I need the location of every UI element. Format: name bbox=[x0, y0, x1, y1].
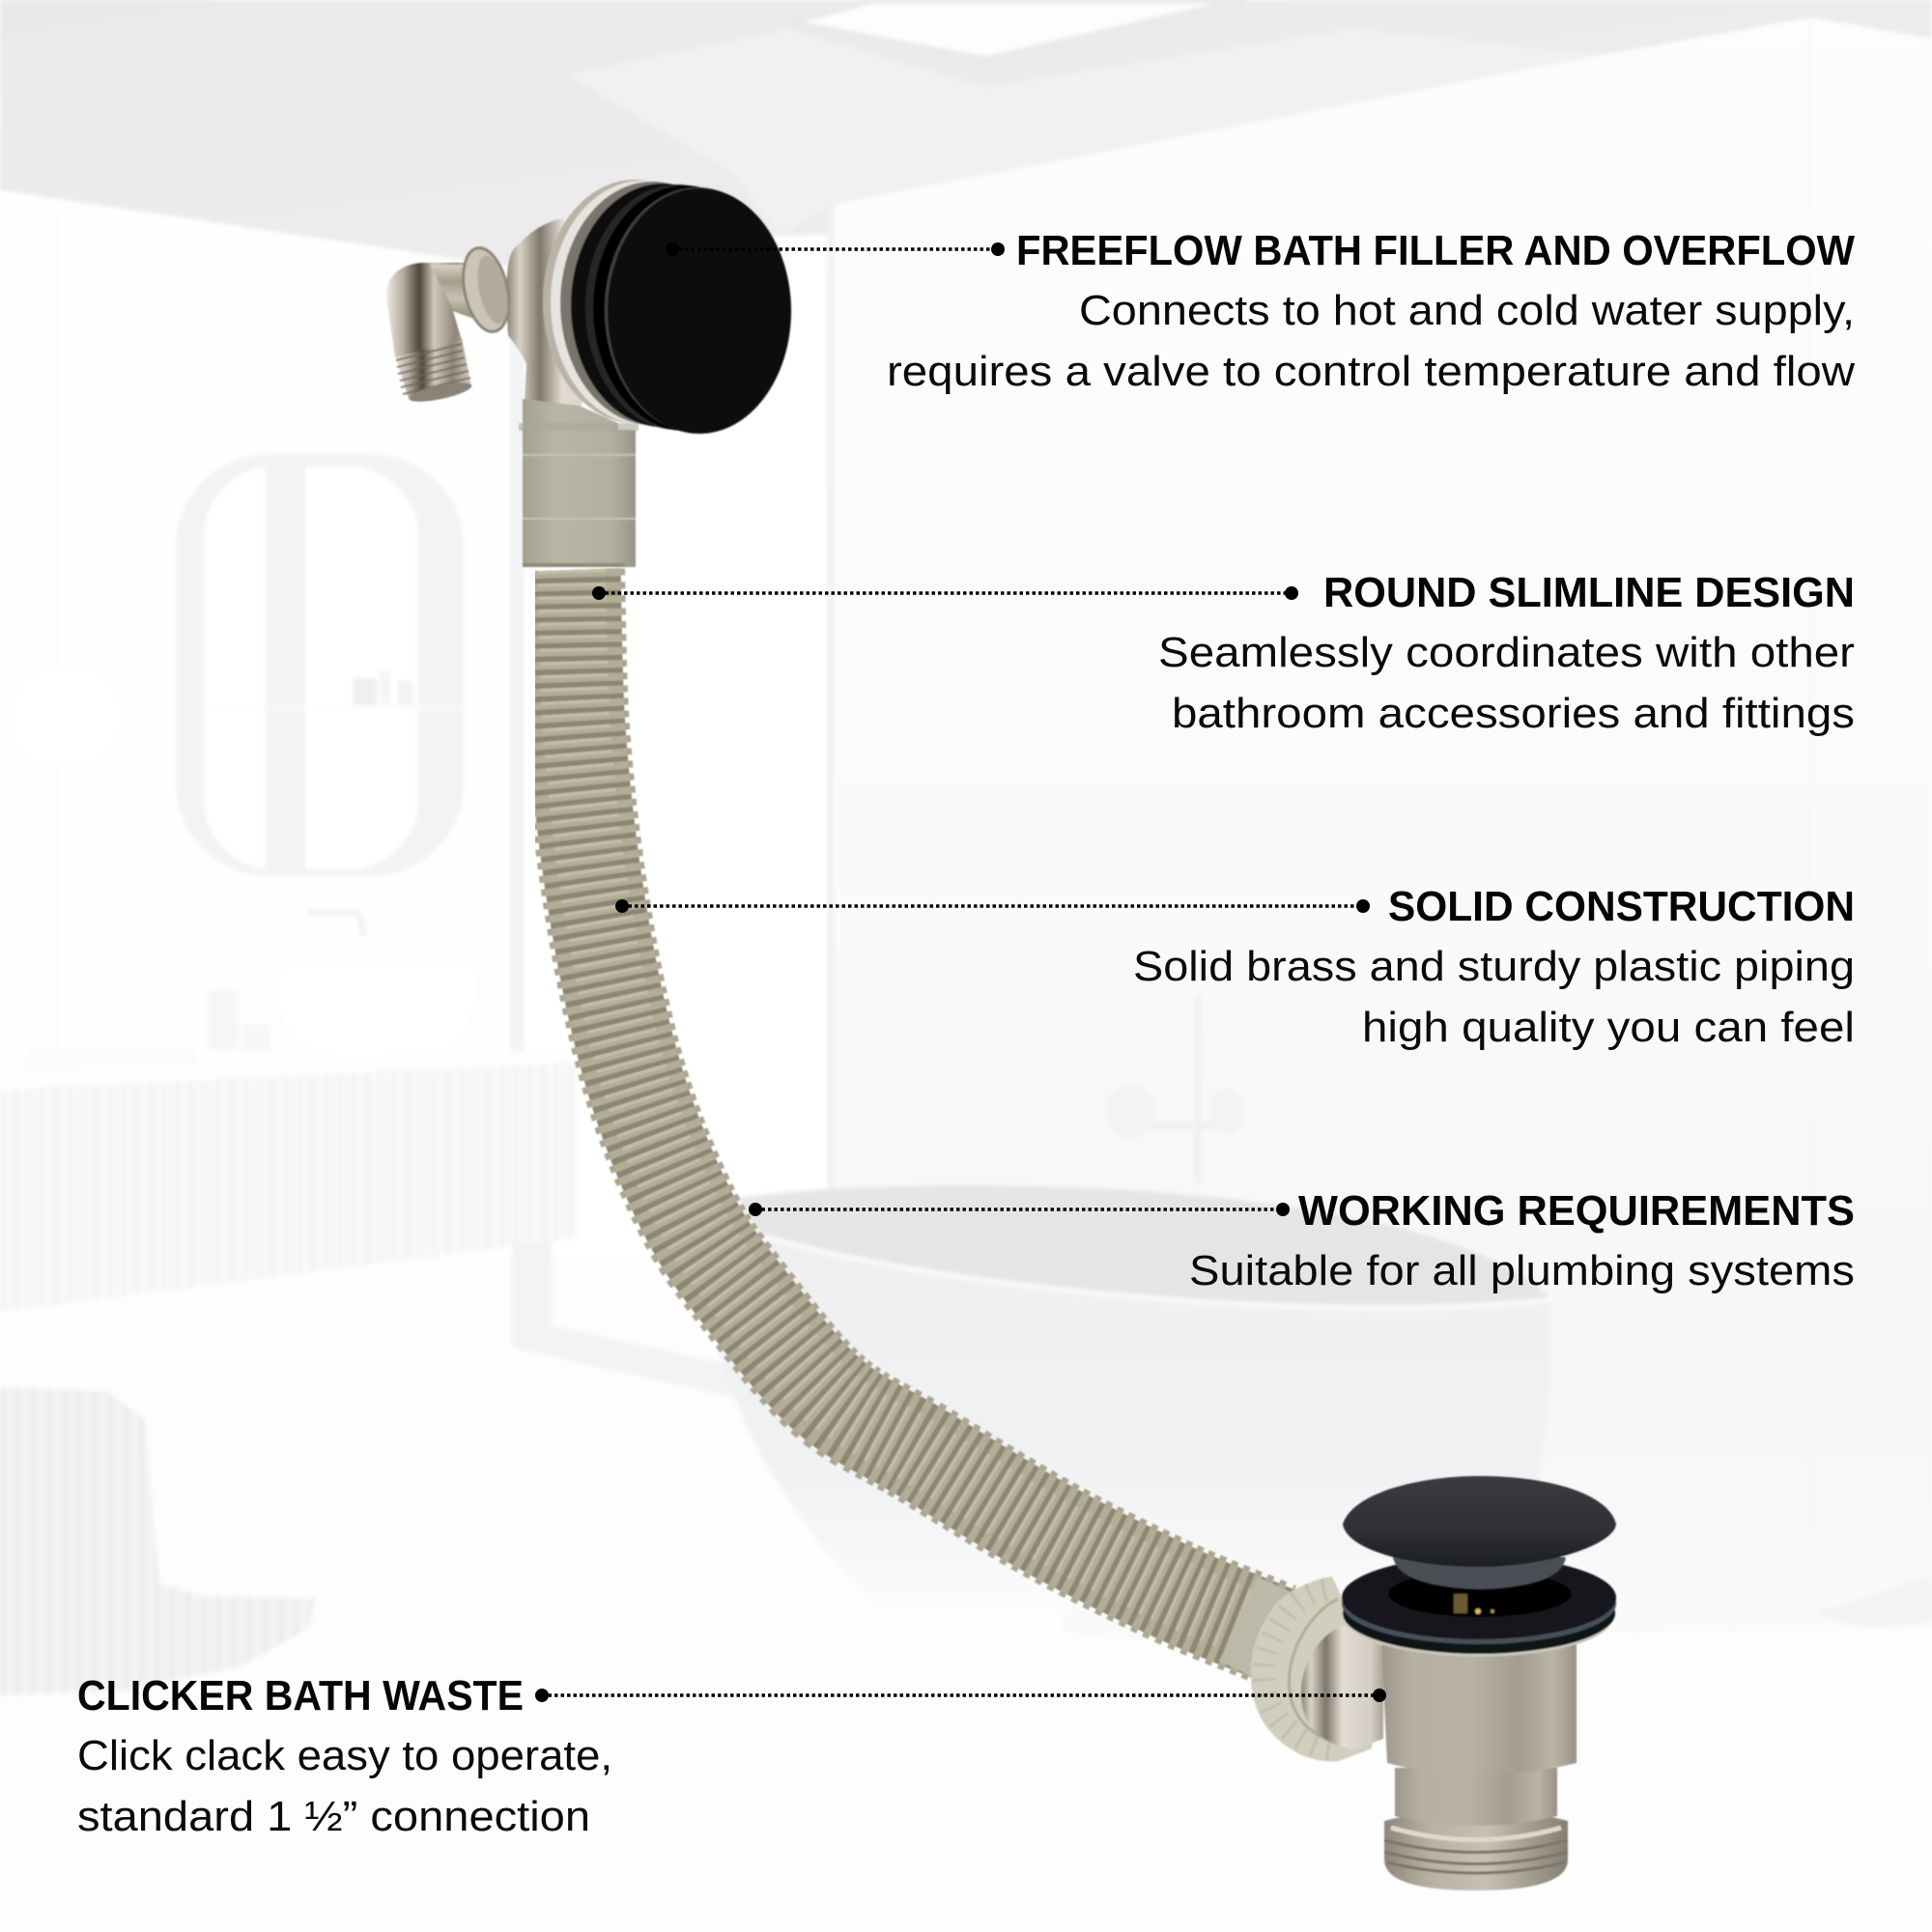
flange silver rim bbox=[1346, 1579, 1612, 1657]
floor bbox=[0, 1594, 1932, 1932]
vanity bbox=[0, 1053, 577, 1312]
right wall vertical panel joint bbox=[1809, 19, 1812, 1604]
callout 5: clicker bath waste bbox=[77, 1672, 1386, 1840]
ceiling recess bbox=[567, 29, 1602, 237]
wall tap bbox=[307, 913, 363, 936]
grey connector sleeve bbox=[519, 399, 639, 567]
ceiling bbox=[0, 0, 1932, 269]
callout 3: solid construction: Solid brass and sturdy plastic piping bbox=[1133, 943, 1855, 990]
bath tub bbox=[720, 1185, 1551, 1623]
plastic union nut bbox=[1251, 1577, 1383, 1762]
threaded inlet bbox=[395, 338, 473, 406]
callout 4: working requirements bbox=[749, 1187, 1855, 1294]
window frame bbox=[512, 1241, 739, 1399]
click cap bbox=[1343, 1476, 1616, 1567]
callout 3: solid construction bbox=[615, 883, 1855, 1051]
callout 5: clicker bath waste: Click clack easy to operate, bbox=[77, 1732, 612, 1779]
overflow disc back layers bbox=[543, 180, 726, 423]
callout 2: round slimline design: bathroom accessories and fittings bbox=[1172, 690, 1855, 737]
flange rubber bbox=[1343, 1573, 1615, 1654]
shower mixer bbox=[1135, 995, 1236, 1183]
callout 3: solid construction: SOLID CONSTRUCTION bbox=[1388, 883, 1855, 930]
pendant lamp bbox=[12, 668, 120, 765]
callout 1: freeflow bath filler and overflow: FREEFLOW BATH FILLER AND OVERFLOW bbox=[1016, 227, 1855, 274]
product: bath filler overflow unit bbox=[386, 180, 791, 567]
lower threaded spigot bbox=[1384, 1808, 1568, 1890]
body lower barrel bbox=[1395, 1768, 1557, 1826]
skylight bbox=[788, 0, 1244, 60]
callout 1: freeflow bath filler and overflow: requires a valve to control temperature and flow bbox=[887, 348, 1855, 395]
callout 2: round slimline design: ROUND SLIMLINE DESIGN bbox=[1323, 569, 1855, 616]
leader line 5 bbox=[535, 1689, 1386, 1702]
leader line 2 bbox=[592, 586, 1298, 600]
callout 2: round slimline design bbox=[592, 569, 1855, 737]
left wall bbox=[0, 190, 522, 1410]
basin bbox=[275, 962, 479, 1058]
callout 4: working requirements: Suitable for all plumbing systems bbox=[1189, 1247, 1855, 1294]
callout 5: clicker bath waste: CLICKER BATH WASTE bbox=[77, 1672, 524, 1719]
product: clicker waste unit bbox=[1251, 1476, 1616, 1890]
lower left wall and floor bbox=[0, 1256, 1063, 1700]
nickel body bbox=[506, 218, 618, 411]
towels bbox=[24, 1048, 198, 1077]
nickel elbow bbox=[1301, 1626, 1383, 1750]
elbow pipe bbox=[386, 263, 478, 357]
callout 5: clicker bath waste: standard 1 ½” connection bbox=[77, 1793, 590, 1840]
floor step right bbox=[1816, 1575, 1932, 1628]
body upper barrel bbox=[1381, 1642, 1577, 1776]
callout 1: freeflow bath filler and overflow: Connects to hot and cold water supply, bbox=[1079, 287, 1855, 334]
mirror bbox=[176, 454, 464, 876]
callout 1: freeflow bath filler and overflow bbox=[666, 227, 1855, 395]
callout 3: solid construction: high quality you can feel bbox=[1362, 1004, 1855, 1051]
product: flexible corrugated hose bbox=[572, 570, 1306, 1650]
overflow disc face bbox=[608, 188, 791, 434]
leader line 4 bbox=[749, 1203, 1290, 1216]
dark well with brass glints bbox=[1388, 1571, 1572, 1617]
callout 4: working requirements: WORKING REQUIREMENTS bbox=[1298, 1187, 1855, 1235]
pouf and throw bbox=[0, 1387, 315, 1695]
hose plain end at waste bbox=[1238, 1619, 1306, 1650]
grey stem bbox=[1393, 1557, 1566, 1589]
collar ring bbox=[456, 243, 516, 336]
leader line 3 bbox=[615, 899, 1370, 913]
white column and its edges bbox=[518, 235, 829, 1352]
callout 2: round slimline design: Seamlessly coordinates with other bbox=[1158, 629, 1855, 676]
leader line 1 bbox=[666, 242, 1005, 256]
